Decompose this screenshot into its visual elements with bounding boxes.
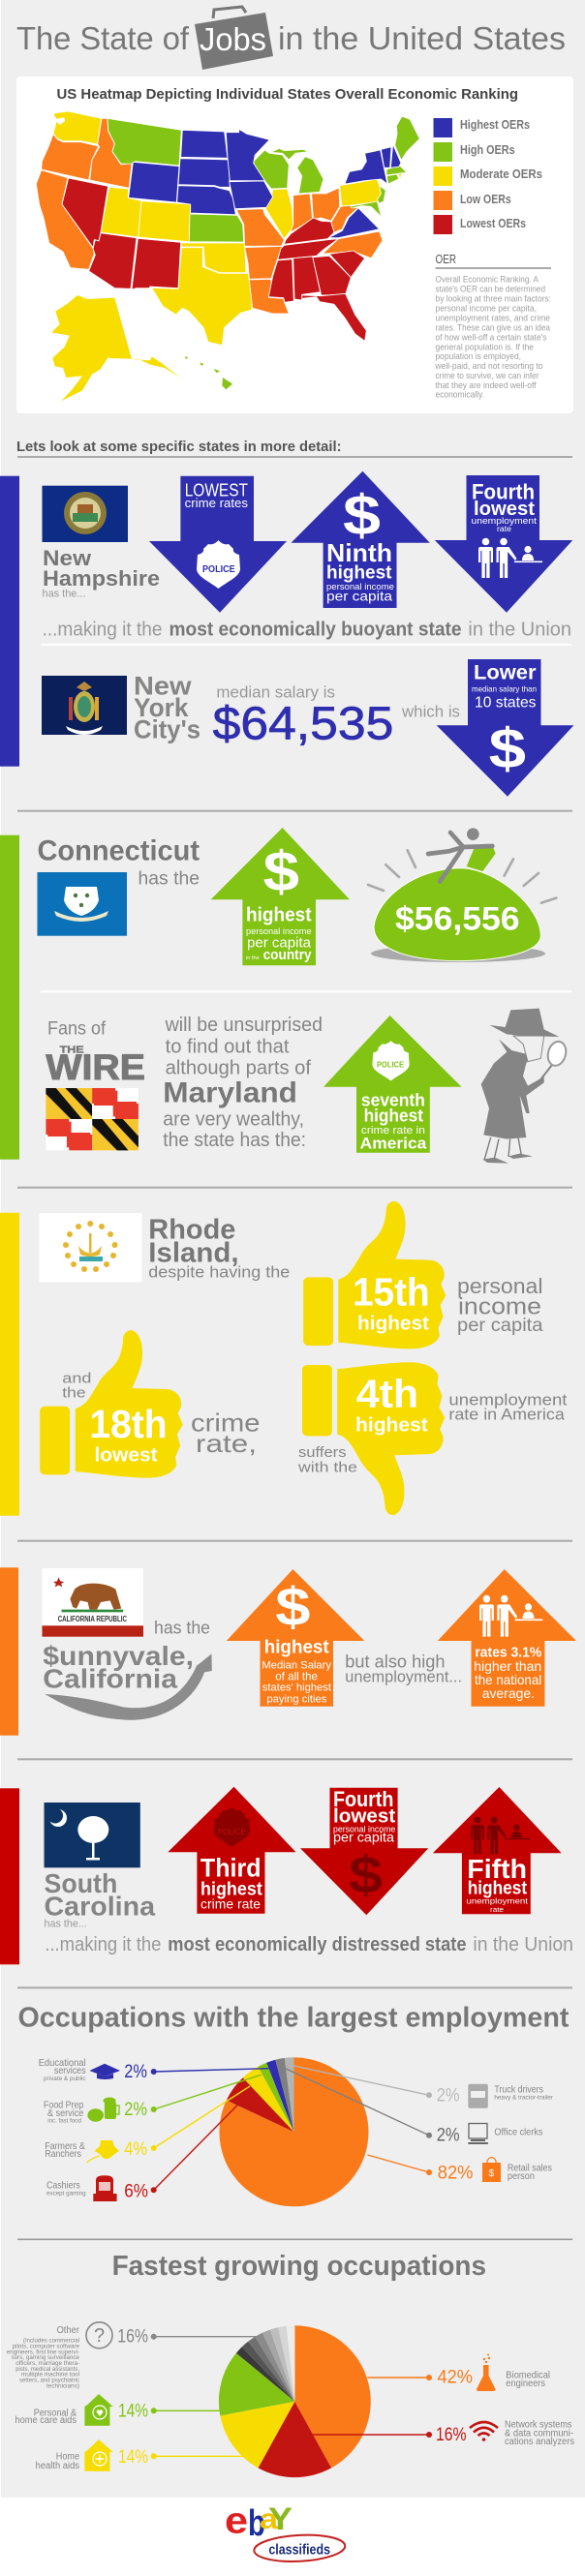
arrow: ninth highest income [291, 471, 430, 608]
legend item: other: setters, and psychiatric [19, 2378, 80, 2384]
arrow: fifth highest unemployment: highest [468, 1879, 528, 1899]
text: personal income per capita [457, 1274, 543, 1336]
text block: OER definition: personal income per capita, [436, 304, 537, 314]
heading: specific states: Lets look at some specific states in more detail: [16, 439, 341, 455]
icon: thumb up 18th: lowest [95, 1444, 158, 1466]
label: Sunnyvale, California: California [43, 1663, 177, 1693]
caption: most economically distressed: ...making it the [45, 1934, 161, 1955]
arrow: fourth lowest income: per capita [333, 1830, 394, 1845]
legend item: educational services: private & public [44, 2076, 86, 2082]
arrow: seventh highest crime: seventh [361, 1091, 425, 1110]
legend item: truck drivers [437, 2084, 554, 2108]
text: and the: the [62, 1384, 86, 1401]
caption: most economically distressed [45, 1934, 573, 1955]
legend item: other: pilots, computer software [13, 2343, 79, 2349]
label: Rhode Island: despite having the [148, 1262, 290, 1281]
icon: money bag with man [368, 828, 556, 962]
pie chart: fastest growing [151, 2325, 432, 2477]
arrow: lowest crime rates: crime rates [185, 496, 248, 510]
flag: Rhode Island [39, 1213, 141, 1282]
text block: OER definition: that they are indeed well-off [436, 380, 537, 390]
legend item: educational services: 2% [124, 2062, 147, 2082]
text: but also high unemployment [345, 1652, 462, 1685]
legend item: retail sales: $ [488, 2168, 494, 2179]
text: suffers with the [297, 1444, 357, 1476]
flag: California: CALIFORNIA REPUBLIC [58, 1615, 127, 1623]
section: green states [0, 828, 571, 1164]
legend item: truck drivers: 2% [437, 2086, 460, 2106]
section: orange state [0, 1567, 576, 1736]
legend item: other: 16% [117, 2326, 148, 2347]
text: but also high unemployment: unemployment... [345, 1667, 462, 1685]
legend item: office clerks: Office clerks [494, 2128, 542, 2138]
map of US states [36, 111, 419, 401]
legend item: other: ? [94, 2325, 105, 2347]
text: personal income per capita: per capita [457, 1316, 543, 1336]
logo: The Wire: Fans of [47, 1018, 107, 1039]
section: red state [0, 1787, 573, 1964]
arrow: fourth lowest income [300, 1787, 428, 1915]
legend item: educational services: services [54, 2065, 86, 2076]
arrow: seventh highest crime: POLICE [377, 1060, 405, 1069]
arrow: fifth highest unemployment [433, 1787, 562, 1914]
label: South Carolina: Carolina [45, 1891, 155, 1921]
text: unemployment rate in America [448, 1391, 568, 1424]
section: blue states [0, 471, 573, 797]
arrow: highest median salary: of all the [275, 1670, 318, 1683]
stat: median salary: median salary is [216, 683, 335, 702]
legend item: personal and home care aids: home care aids [15, 2415, 77, 2426]
legend item: biomedical engineers: Biomedical [506, 2371, 550, 2381]
label: Sunnyvale, California: $unnyvale, [43, 1641, 194, 1671]
arrow: ninth highest income: per capita [326, 589, 392, 604]
heading: fastest growing occupations: Fastest growing occupations [112, 2251, 486, 2282]
legend item: farmers and ranchers: Ranchers [45, 2148, 81, 2160]
legend item: personal and home care aids [15, 2394, 148, 2426]
arrow: fifth highest unemployment: Fifth [467, 1854, 527, 1884]
icon: thumb down 4th: 4th [356, 1371, 418, 1415]
text block: Maryland [163, 1015, 323, 1151]
arrow: highest personal income: personal income [246, 926, 312, 936]
legend item: biomedical engineers: engineers [506, 2379, 545, 2389]
text block: Maryland: Maryland [163, 1076, 297, 1108]
label: South Carolina: has the... [45, 1919, 87, 1930]
stat: median salary [213, 683, 460, 749]
arrow: highest personal income: $ [263, 840, 299, 903]
arrow: lower median salary: Lower [474, 662, 537, 684]
legend item: food prep: Food Prep [44, 2100, 83, 2111]
legend item: farmers and ranchers: Farmers & [45, 2140, 85, 2152]
flag: South Carolina [45, 1803, 140, 1867]
arrow: highest median salary [227, 1569, 364, 1707]
legend item: educational services: Educational [39, 2057, 86, 2069]
legend item: cashiers [46, 2175, 148, 2201]
legend item: personal and home care aids: 14% [118, 2402, 148, 2422]
flag: California [43, 1568, 143, 1637]
arrow: fourth lowest income: personal income [333, 1824, 395, 1834]
arrow: fifth highest unemployment: unemployment [467, 1896, 529, 1906]
arrow: ninth highest income: Ninth [326, 538, 392, 567]
arrow: lowest crime rates [149, 476, 287, 613]
label: Rhode Island [148, 1214, 290, 1281]
text block: OER definition: population is employed, [436, 351, 521, 361]
arrow: highest median salary: paying cities [266, 1693, 327, 1705]
text: has the: has the [138, 868, 200, 889]
flag: New Hampshire [43, 486, 128, 542]
text block: OER definition: well-paid, and not resorting to [435, 361, 542, 371]
logo: The Wire [46, 1018, 145, 1087]
arrow: highest median salary: states' highest [262, 1682, 331, 1694]
legend item: farmers and ranchers: 4% [124, 2139, 147, 2160]
arrow: lower median salary: 10 states [475, 695, 537, 712]
label: New York City: York [134, 693, 189, 722]
legend item: home health aids: Home [56, 2452, 79, 2463]
text: suffers with the: with the [297, 1460, 357, 1476]
legend item: biomedical engineers: 42% [438, 2368, 473, 2388]
text: crime rate: crime [191, 1408, 260, 1437]
logo: The Wire: THE [60, 1045, 84, 1055]
arrow: lower median salary [437, 659, 573, 797]
icon: detective [481, 1009, 569, 1164]
arrow: highest personal income: highest [246, 905, 312, 926]
legend item: network analysts [436, 2419, 574, 2447]
icon: thumb down 4th [302, 1362, 445, 1515]
logo: eBay classifieds: classifieds [268, 2541, 330, 2558]
label: New Hampshire: has the... [43, 589, 85, 600]
text block: Maryland: will be unsurprised [165, 1015, 323, 1036]
label: Connecticut: Connecticut [37, 834, 200, 866]
arrow: ninth highest income: highest [326, 562, 392, 583]
legend item: food prep: inc. fast food [47, 2118, 81, 2125]
arrow: fourth lowest income: $ [349, 1846, 383, 1904]
label: Rhode Island: Island, [148, 1237, 238, 1268]
title [16, 7, 566, 70]
logo: The Wire: WIRE [46, 1047, 145, 1087]
logo: eBay classifieds [225, 2501, 346, 2563]
arrow: lower median salary: $ [489, 717, 526, 780]
legend item: retail sales: person [508, 2171, 535, 2182]
label: Sunnyvale, California [43, 1641, 212, 1720]
icon: thumb down 4th: highest [355, 1414, 428, 1436]
label: South Carolina: South [45, 1868, 117, 1898]
arrow: highest median salary: $ [275, 1576, 310, 1637]
text block: OER definition: economically. [436, 390, 484, 400]
legend: Moderate OERs [460, 167, 542, 181]
legend item: other [7, 2322, 148, 2390]
label: New York City: New [134, 671, 193, 700]
arrow: fourth lowest unemployment: rate [497, 525, 512, 533]
legend item: home health aids: 14% [118, 2447, 148, 2468]
arrow: seventh highest crime [323, 1015, 461, 1153]
text block: OER definition: Overall Economic Ranking. A [436, 275, 539, 285]
legend item: cashiers: 6% [124, 2181, 148, 2201]
arrow: rates higher than national average: higher than [474, 1658, 541, 1674]
text block: OER definition: crime to survive, we can infer [436, 371, 539, 380]
section: yellow state [0, 1201, 568, 1516]
legend: Highest OERs [460, 117, 530, 132]
legend item: home health aids: health aids [36, 2461, 79, 2471]
arrow: highest personal income [211, 828, 350, 965]
caption: most economically buoyant: ...making it the [43, 620, 163, 641]
arrow: ninth highest income: $ [343, 484, 381, 547]
arrow: fourth lowest unemployment [435, 475, 572, 613]
legend [434, 117, 542, 234]
label: New Hampshire: New [43, 546, 92, 570]
logo: eBay classifieds: a [260, 2503, 278, 2535]
legend: Lowest OERs [460, 216, 526, 230]
legend item: other: officers, marriage thera- [15, 2360, 79, 2367]
label: New York City: City's [134, 715, 200, 744]
text block: OER definition: general population is. If the [436, 342, 534, 351]
arrow: highest personal income: per capita [247, 934, 312, 951]
text: unemployment rate in America: rate in America [448, 1406, 565, 1424]
text block: OER definition: unemployment rates, and crime [436, 314, 550, 323]
arrow: third highest crime rate: crime rate [200, 1896, 261, 1912]
logo: eBay classifieds: Y [268, 2501, 292, 2536]
text: and the [62, 1370, 91, 1401]
heading: heatmap title: US Heatmap Depicting Individual States Overall Economic Ranking [56, 86, 518, 103]
legend item: retail sales: 82% [438, 2164, 473, 2184]
text: crime rate: rate, [196, 1429, 257, 1458]
icon: thumb up 15th: 15th [353, 1269, 430, 1314]
legend item: food prep [44, 2097, 147, 2125]
label: New Hampshire [43, 546, 160, 600]
legend item: other: (Includes commercial [23, 2337, 80, 2344]
legend item: food prep: & service [47, 2107, 83, 2119]
label: New Hampshire: Hampshire [43, 566, 160, 591]
arrow: highest median salary: highest [264, 1637, 329, 1657]
stat: median salary: $64,535 [213, 698, 393, 749]
arrow: fourth lowest unemployment: lowest [474, 499, 535, 520]
heading: occupations with the largest employment: Occupations with the largest employment [17, 2002, 570, 2033]
arrow: rates higher than national average [438, 1569, 576, 1707]
logo: eBay classifieds: b [248, 2503, 265, 2544]
arrow: third highest crime rate: Third [200, 1853, 262, 1882]
legend: High OERs [460, 142, 515, 157]
label: Rhode Island: Rhode [148, 1214, 235, 1245]
legend: Low OERs [460, 192, 511, 206]
arrow: third highest crime rate [168, 1787, 296, 1914]
arrow: lowest crime rates: POLICE [202, 564, 235, 575]
text: unemployment rate in America: unemployment [448, 1391, 568, 1409]
legend item: office clerks [437, 2124, 542, 2146]
icon: thumb up 18th: 18th [89, 1402, 168, 1446]
arrow: seventh highest crime: America [360, 1135, 427, 1153]
label: South Carolina [45, 1868, 155, 1930]
legend item: office clerks: 2% [437, 2126, 460, 2146]
arrow: third highest crime rate: POLICE [218, 1828, 246, 1836]
arrow: highest personal income: country [263, 947, 312, 963]
text block: OER definition [435, 252, 551, 400]
logo: eBay classifieds: e [225, 2501, 248, 2542]
legend item: other: pists, medical assistants, [15, 2366, 79, 2373]
arrow: rates higher than national average: average. [482, 1685, 535, 1701]
flag: Connecticut [37, 872, 127, 936]
legend item: other: multiple machine tool [21, 2372, 80, 2379]
icon: thumb up 18th [40, 1330, 183, 1478]
text block: Maryland: the state has the: [163, 1130, 306, 1151]
legend item: truck drivers: heavy & tractor-trailer [494, 2094, 554, 2101]
text block: OER definition: by looking at three main factors: [436, 294, 551, 304]
legend item: other: engineers, first line supervi- [7, 2349, 79, 2355]
caption: most economically buoyant: most economically buoyant state [169, 620, 461, 641]
arrow: rates higher than national average: rates 3.1% [475, 1645, 541, 1661]
legend item: farmers and ranchers [45, 2139, 147, 2163]
legend item: network analysts: 16% [436, 2425, 467, 2445]
arrow: third highest crime rate: highest [200, 1880, 262, 1900]
arrow: seventh highest crime: highest [364, 1106, 423, 1125]
arrow: highest median salary: Median Salary [262, 1659, 331, 1671]
arrow: highest personal income: in the [246, 955, 260, 961]
legend item: other: sors, gaming surveillance [12, 2354, 79, 2361]
legend item: other: technicians) [46, 2383, 79, 2390]
text block: Maryland: to find out that [166, 1036, 290, 1057]
title: in the United States [278, 20, 566, 56]
flag: New York [42, 676, 127, 735]
caption: most economically distressed: most economically distressed state [168, 1934, 467, 1955]
arrow: fourth lowest income: lowest [333, 1806, 396, 1828]
text: but also high unemployment: but also high [345, 1652, 446, 1671]
arrow: lower median salary: median salary than [472, 683, 537, 693]
arrow: fifth highest unemployment: rate [490, 1905, 504, 1914]
flag: Maryland [46, 1088, 139, 1150]
text: suffers with the: suffers [298, 1444, 347, 1461]
legend item: truck drivers: Truck drivers [494, 2085, 543, 2096]
arrow: lowest crime rates: LOWEST [185, 481, 248, 500]
arrow: fourth lowest unemployment: Fourth [472, 480, 535, 504]
legend item: personal and home care aids: Personal & [34, 2409, 77, 2419]
stat: median salary: which is [401, 703, 460, 721]
label: New York City [134, 671, 200, 744]
legend item: network analysts: & data communi- [505, 2428, 573, 2439]
title: The State of [16, 20, 190, 56]
text: personal income per capita: income [458, 1293, 541, 1319]
arrow: fourth lowest unemployment: unemployment [471, 516, 538, 526]
legend item: other: Other [56, 2325, 80, 2336]
legend item: network analysts: Network systems [505, 2419, 571, 2430]
text block: Maryland: although parts of [166, 1057, 311, 1078]
pie chart: largest employment [151, 2057, 432, 2206]
text block: OER definition: of how well-off a certain state's [436, 332, 547, 342]
icon: thumb up 15th [303, 1201, 446, 1349]
legend item: home health aids [36, 2440, 148, 2471]
legend item: retail sales: Retail sales [508, 2164, 552, 2174]
arrow: rates higher than national average: the national [475, 1672, 541, 1687]
text block: Maryland: are very wealthy, [163, 1108, 304, 1130]
legend item: cashiers: Cashiers [46, 2180, 80, 2192]
caption: most economically buoyant: in the Union [468, 620, 571, 641]
legend item: cashiers: except gaming [46, 2191, 86, 2197]
text block: OER definition: rates. These can give us an idea [436, 322, 551, 332]
legend item: food prep: 2% [124, 2100, 147, 2120]
caption: most economically buoyant [43, 620, 571, 641]
title: Jobs [200, 21, 266, 57]
panel: US heatmap [16, 76, 573, 413]
text: crime rate [191, 1408, 260, 1458]
text: personal income per capita: personal [457, 1274, 542, 1298]
text: has the: has the [154, 1618, 210, 1637]
arrow: fourth lowest income: Fourth [333, 1787, 393, 1811]
legend item: biomedical engineers [438, 2354, 550, 2391]
legend item: retail sales [438, 2157, 552, 2184]
legend item: educational services [39, 2057, 147, 2082]
text block: OER definition: state's OER can be determined [436, 285, 545, 294]
text block: OER definition: OER [436, 252, 456, 266]
text: and the: and [62, 1370, 91, 1386]
caption: most economically distressed: in the Union [473, 1934, 573, 1955]
arrow: seventh highest crime: crime rate in [361, 1125, 425, 1136]
arrow: ninth highest income: personal income [326, 582, 394, 592]
icon: thumb up 15th: highest [357, 1313, 429, 1334]
legend item: network analysts: cations analyzers [505, 2437, 574, 2447]
icon: money bag with man: $56,556 [395, 901, 520, 938]
